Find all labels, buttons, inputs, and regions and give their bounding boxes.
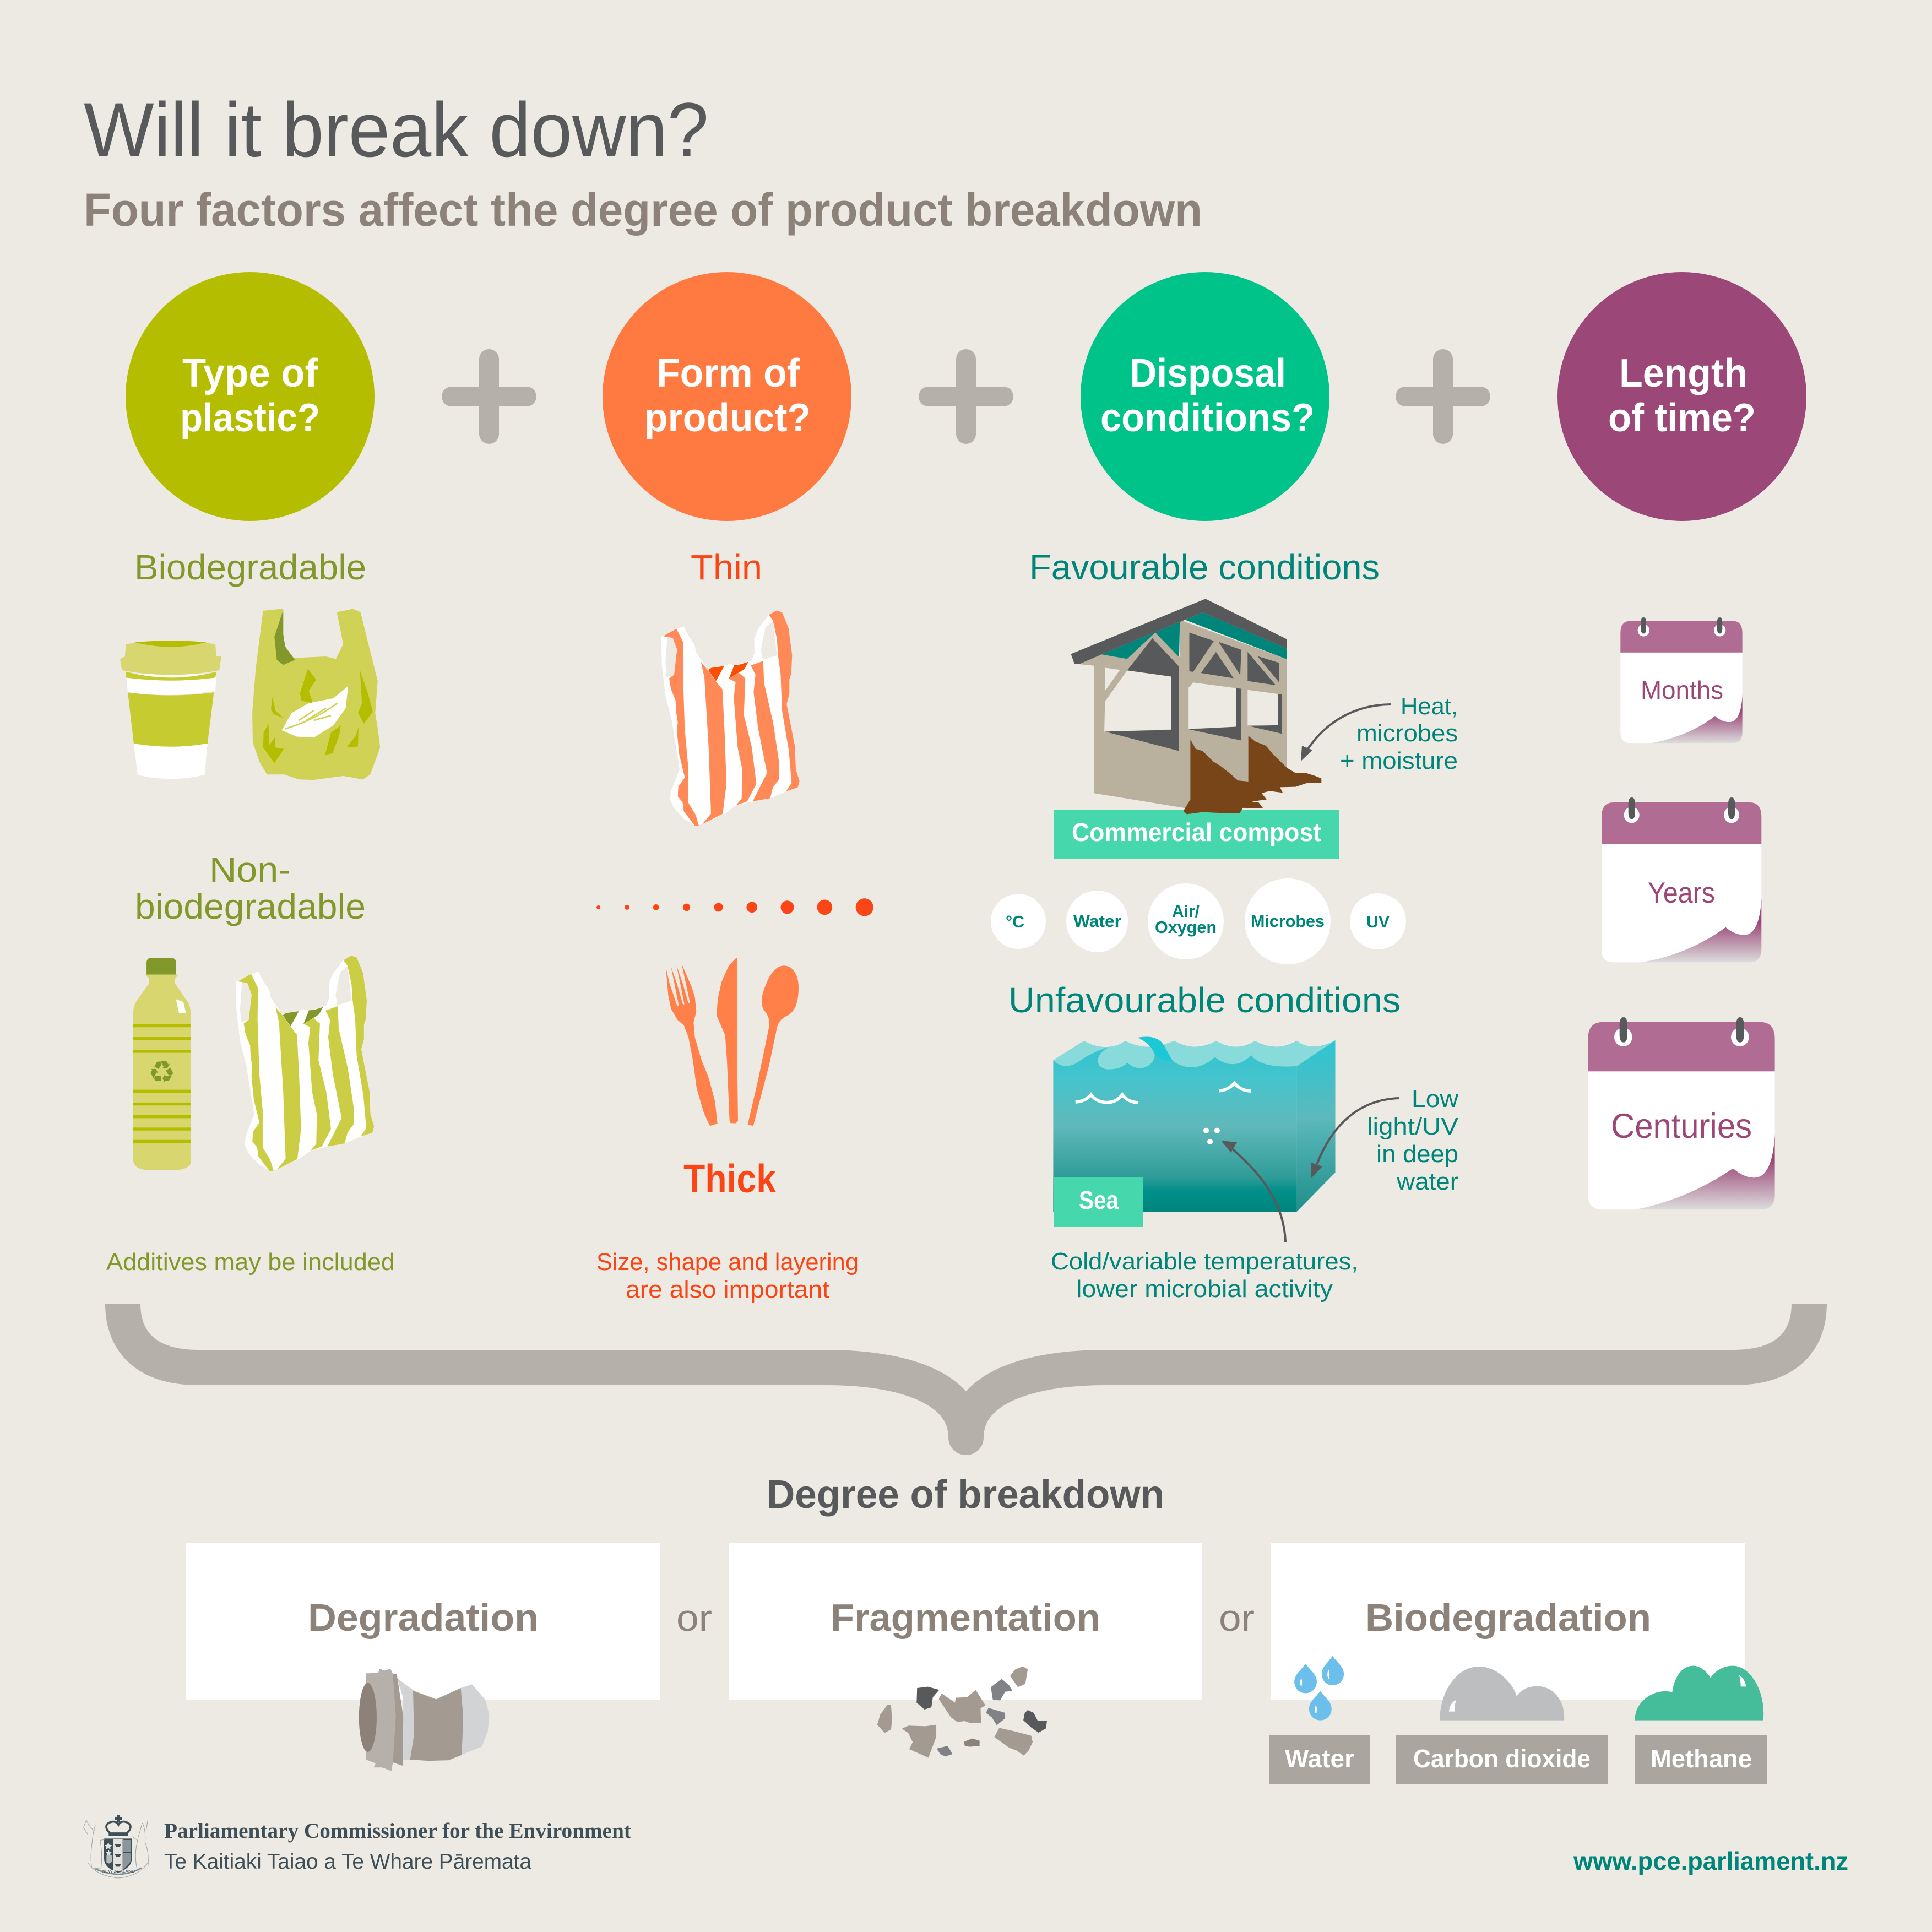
callout: low light: Low [1412, 1086, 1458, 1112]
condition circles: Air/ [1172, 902, 1200, 921]
callout: cold temperatures [1051, 1248, 1358, 1303]
icon: water drops [1294, 1656, 1344, 1721]
calendar: months: Months [1641, 676, 1723, 704]
factor circle: form of product [603, 272, 851, 521]
icon: recycled bottle: ♻ [148, 1055, 176, 1090]
icon: thick cutlery [666, 958, 799, 1126]
crest shield [104, 1838, 132, 1873]
heading: biodegradable: Biodegradable [134, 547, 366, 587]
panel: degradation [186, 1543, 660, 1771]
plus sign 1 [442, 349, 536, 444]
factor circle: form of product: product? [644, 396, 811, 440]
callout: heat, microbes and moisture: microbes [1356, 720, 1458, 747]
crest shield panels [105, 1839, 131, 1871]
heading: unfavourable conditions: Unfavourable conditions [1008, 980, 1401, 1020]
label: methane: Methane [1651, 1744, 1752, 1773]
callout: low light: in deep [1376, 1141, 1458, 1168]
factor circle: length of time: Length [1619, 351, 1748, 395]
calendar: centuries: Centuries [1611, 1107, 1752, 1146]
icon: methane cloud [1635, 1666, 1763, 1721]
condition circles [991, 878, 1406, 964]
factor circle: form of product: Form of [656, 351, 800, 395]
heading: non-biodegradable: biodegradable [135, 887, 366, 926]
callout: low light: light/UV [1367, 1113, 1459, 1140]
callout: low light: water [1396, 1168, 1458, 1195]
label: commercial compost [1054, 810, 1339, 859]
calendar: years: Years [1648, 877, 1715, 909]
label: thick: Thick [683, 1157, 777, 1201]
icon: sea block [1053, 1036, 1336, 1212]
factor circle: disposal conditions: conditions? [1100, 396, 1315, 440]
arrow: to microbes [1221, 1141, 1285, 1242]
condition circles: Oxygen [1155, 918, 1217, 937]
condition circles: Water [1073, 911, 1121, 931]
condition circles: Microbes [1251, 911, 1325, 931]
factor circle: type of plastic [126, 272, 375, 521]
panel: fragmentation [729, 1543, 1202, 1758]
callout: heat, microbes and moisture [1340, 693, 1458, 774]
callout: cold temperatures: lower microbial activity [1076, 1276, 1333, 1303]
crest ship marks [115, 1844, 121, 1866]
heading: favourable conditions: Favourable conditions [1029, 547, 1380, 587]
heading: non-biodegradable [135, 850, 366, 926]
condition circles: UV [1366, 912, 1390, 931]
title: Will it break down? [84, 86, 709, 173]
label: carbon dioxide [1396, 1735, 1608, 1784]
crest crown [106, 1815, 131, 1836]
icon: compost pile [1184, 736, 1321, 814]
factor circle: type of plastic: plastic? [180, 396, 320, 440]
heading: thin: Thin [691, 547, 762, 587]
icon: biodegradable bag [252, 609, 380, 780]
panel: biodegradation: Biodegradation [1365, 1596, 1651, 1639]
plus sign 2 [919, 349, 1013, 444]
factor circle: length of time: of time? [1608, 396, 1756, 440]
condition circles: °C [1006, 912, 1024, 931]
icon: carbon dioxide cloud [1440, 1667, 1564, 1721]
footer: organisation name: Te Kaitiaki Taiao a Te Whare Pāremata [164, 1850, 531, 1874]
icon: biodegradable cup [120, 641, 221, 779]
plus sign 3 [1396, 349, 1490, 444]
callout: heat, microbes and moisture: Heat, [1401, 693, 1458, 720]
subtitle: Four factors affect the degree of product breakdown [84, 184, 1202, 236]
label: sea [1054, 1177, 1143, 1227]
label: carbon dioxide: Carbon dioxide [1413, 1744, 1591, 1773]
label: water [1269, 1735, 1370, 1784]
callout: low light [1367, 1086, 1459, 1195]
callout: cold temperatures: Cold/variable temperatures, [1051, 1248, 1358, 1275]
panel: fragmentation: Fragmentation [831, 1596, 1100, 1639]
icon: New Zealand coat of arms [84, 1815, 149, 1878]
factor circle: length of time [1557, 272, 1806, 521]
factor circle: disposal conditions: Disposal [1130, 351, 1286, 395]
calendar: months [1620, 617, 1743, 743]
note: size, shape and layering [596, 1249, 859, 1303]
crest motto: NEW ZEALAND [102, 1869, 135, 1874]
label: sea: Sea [1079, 1186, 1119, 1214]
footer: organisation name [164, 1819, 631, 1874]
footer: organisation name: Parliamentary Commissioner for the Environment [164, 1819, 631, 1843]
label: methane [1635, 1735, 1767, 1784]
connector: or: or [676, 1597, 712, 1639]
heading: non-biodegradable: Non- [209, 850, 291, 889]
note: additives: Additives may be included [106, 1249, 395, 1276]
callout: heat, microbes and moisture: + moisture [1340, 747, 1458, 774]
footer: website: www.pce.parliament.nz [1573, 1847, 1848, 1875]
note: size, shape and layering: Size, shape and layering [596, 1249, 859, 1276]
factor circle: disposal conditions [1081, 272, 1329, 521]
arrow: to deep water [1311, 1098, 1399, 1178]
icon: compost shed [1071, 599, 1287, 809]
note: size, shape and layering: are also important [626, 1276, 829, 1303]
arrow: to compost [1301, 704, 1391, 761]
factor circle: type of plastic: Type of [182, 351, 318, 395]
label: water: Water [1285, 1744, 1354, 1773]
crest supporters [84, 1820, 149, 1878]
icon: plastic fragments [877, 1667, 1047, 1758]
calendar: years [1602, 797, 1761, 962]
icon: non-biodegradable striped bag [236, 956, 374, 1171]
thin to thick dotted scale [596, 898, 873, 916]
icon: thin striped bag [661, 610, 800, 826]
brace [123, 1304, 1809, 1446]
heading: degree of breakdown: Degree of breakdown [767, 1473, 1164, 1517]
icon: recycled bottle [133, 958, 191, 1170]
panel: biodegradation [1271, 1543, 1763, 1721]
panel: degradation: Degradation [308, 1596, 539, 1639]
connector: or: or [1219, 1597, 1255, 1639]
icon: degraded cup [359, 1669, 489, 1771]
label: commercial compost: Commercial compost [1072, 818, 1321, 846]
calendar: centuries [1588, 1017, 1775, 1209]
